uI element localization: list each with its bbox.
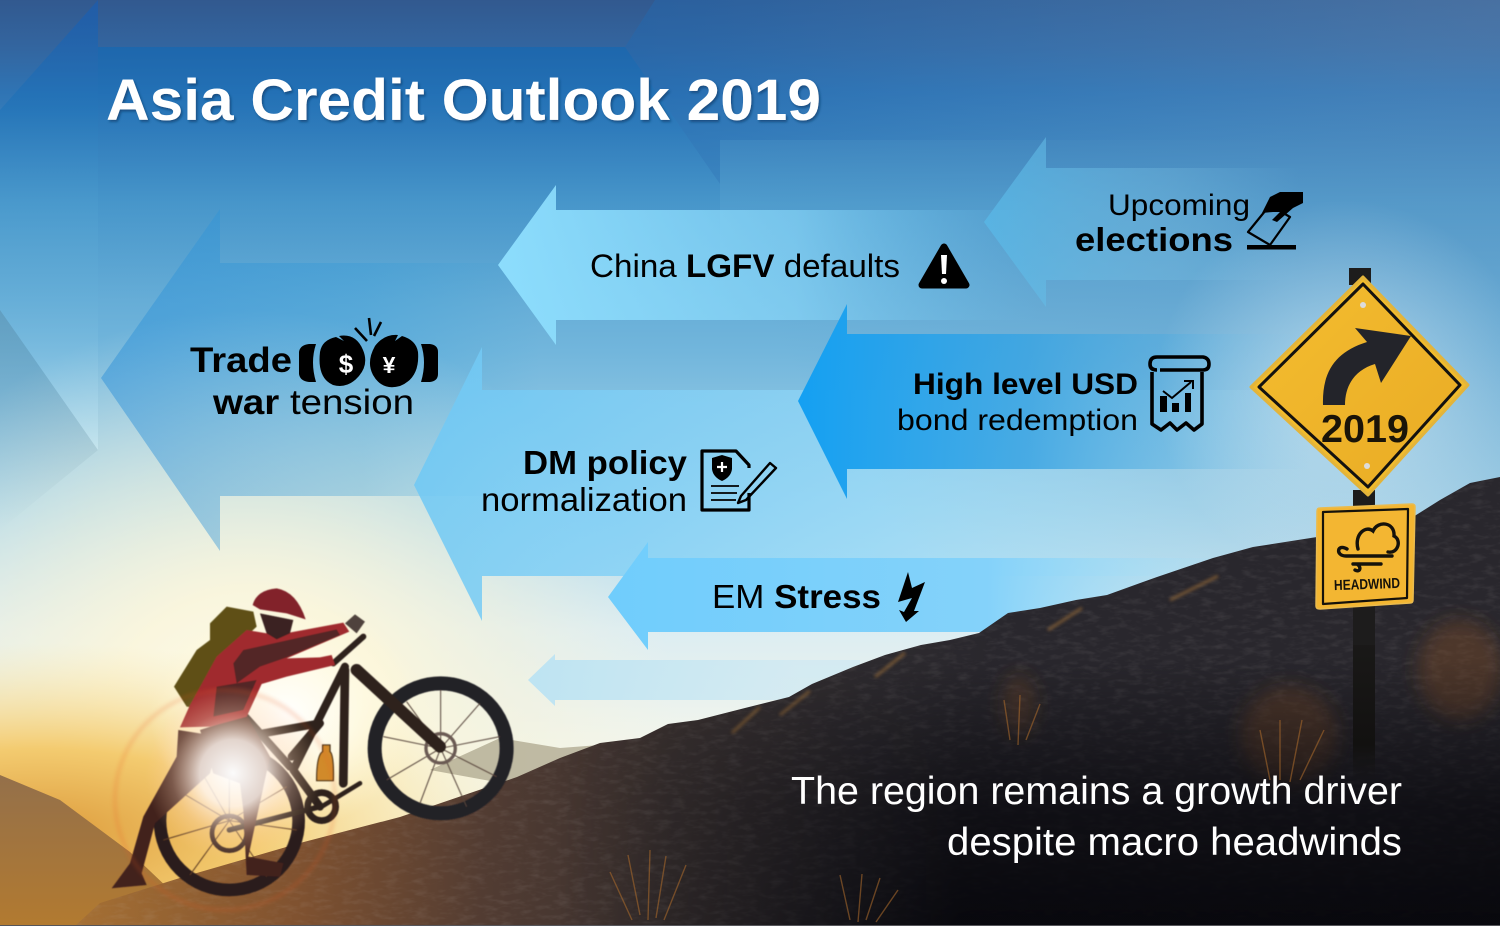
impact lines bbox=[355, 318, 381, 341]
label: high level USD bond redemption bbox=[897, 357, 1209, 437]
label: DM policy normalization: normalization bbox=[481, 481, 687, 518]
water bottle bbox=[317, 745, 333, 781]
icon: boxing gloves with dollar and yen bbox=[299, 318, 438, 387]
jacket shading bbox=[213, 629, 340, 717]
sun lens flare bbox=[115, 685, 335, 910]
icon: receipt with chart bbox=[1150, 357, 1209, 430]
front wheel bbox=[375, 683, 507, 813]
post top bbox=[1349, 268, 1375, 645]
label: trade war tension: war tension bbox=[212, 383, 414, 422]
rider front leg bbox=[200, 715, 283, 877]
arrows: headwinds pointing left bbox=[0, 0, 1500, 706]
dark foreground shadow bbox=[616, 680, 1500, 925]
label: EM Stress: EM Stress bbox=[712, 578, 881, 615]
label: DM policy normalization bbox=[481, 444, 776, 518]
hillside bbox=[0, 470, 1500, 926]
title: Asia Credit Outlook 2019 bbox=[106, 68, 821, 133]
arrow: DM policy bbox=[414, 347, 1330, 621]
cyclist pushing mountain bike bbox=[112, 588, 507, 890]
foreground grass bbox=[610, 695, 1324, 922]
arrow: upcoming elections bbox=[984, 137, 1300, 307]
icon: hand casting ballot bbox=[1247, 192, 1303, 250]
label: Upcoming elections: Upcoming bbox=[1108, 189, 1250, 222]
icon: 2019 diamond road sign bbox=[1251, 277, 1468, 495]
post bbox=[1353, 640, 1375, 780]
label: high level USD bond redemption: High level USD bbox=[913, 368, 1138, 401]
backpack bbox=[174, 607, 257, 708]
sign glow bbox=[1155, 200, 1500, 580]
label: high level USD bond redemption: bond redemption bbox=[897, 404, 1138, 437]
icon: 2019 diamond road sign: 2019 bbox=[1321, 408, 1409, 451]
arrow: top backdrop bbox=[625, 0, 1500, 184]
label: trade war tension bbox=[190, 318, 438, 422]
arrow: upper-left backdrop bbox=[0, 0, 98, 450]
arrow: China LGFV bbox=[498, 185, 1040, 345]
icon: boxing gloves with dollar and yen: $ bbox=[339, 349, 354, 379]
icon: warning triangle bbox=[922, 247, 966, 285]
icon: road sign post and signs bbox=[1251, 268, 1468, 780]
caption: growth driver statement bbox=[791, 770, 1402, 864]
icon: curved arrow bbox=[1323, 328, 1411, 405]
icon: document with shield and pen bbox=[702, 451, 776, 510]
rider jacket bbox=[180, 623, 349, 727]
arrow: trade war bbox=[101, 209, 540, 551]
label: Upcoming elections: elections bbox=[1075, 221, 1233, 258]
rear wheel bbox=[160, 751, 299, 890]
arrow: EM stress bbox=[608, 542, 1240, 650]
icon: lightning bolt bbox=[898, 572, 925, 622]
label: DM policy normalization: DM policy bbox=[523, 444, 688, 481]
icon: headwind sign bbox=[1316, 504, 1415, 609]
caption: growth driver statement: despite macro headwinds bbox=[947, 821, 1402, 864]
label: trade war tension: Trade bbox=[190, 341, 292, 380]
arrow: upper-left backdrop shaft bbox=[98, 47, 720, 300]
caption: growth driver statement: The region remains a growth driver bbox=[791, 770, 1402, 813]
rider rear leg bbox=[112, 730, 220, 888]
rider head and helmet bbox=[253, 588, 365, 639]
arrow: small lower bbox=[528, 654, 860, 706]
icon: headwind sign: HEADWIND bbox=[1334, 576, 1400, 594]
label: EM Stress bbox=[712, 572, 925, 622]
label: Upcoming elections bbox=[1075, 189, 1303, 258]
label: China LGFV defaults: China LGFV defaults bbox=[590, 248, 900, 284]
arrow: high level USD bbox=[798, 304, 1310, 499]
icon: boxing gloves with dollar and yen: ¥ bbox=[383, 352, 396, 378]
bike frame bbox=[229, 637, 440, 830]
